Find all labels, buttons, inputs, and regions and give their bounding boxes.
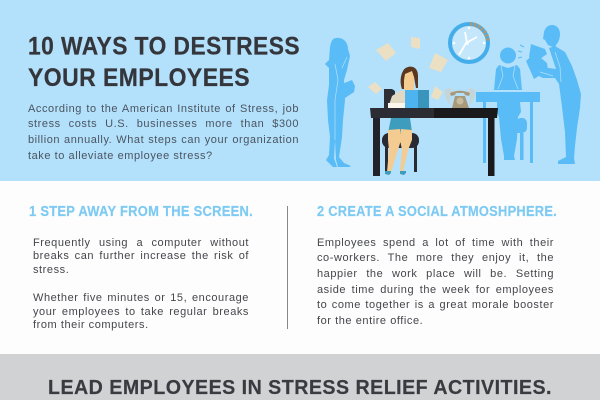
text: tip 2 body: to come together is a great morale booster [317,299,554,311]
title: 10 WAYS TO DESTRESS [28,32,300,60]
illustration: stressed office scene [325,22,581,176]
text: tip 1 second paragraph: Whether five minutes or 15, encourage [33,292,249,304]
desk [370,108,498,176]
text: tip 2 body: Employees spend a lot of time with their [317,236,554,248]
text: tip 1 second paragraph [33,292,249,331]
hero band background [0,0,600,181]
text: tip 2 body [317,236,554,327]
text: tip 1 second paragraph: your employees to take regular breaks [33,306,249,318]
intro text: According to the American Institute of Stress, job [28,102,299,114]
title: YOUR EMPLOYEES [28,64,250,92]
intro text: take to alleviate employee stress? [28,150,213,162]
figure: woman at desk on chair [382,67,429,175]
text: tip 1 first paragraph: breaks can further increase the risk of [33,250,249,262]
icon: wall clock [450,24,488,62]
intro text: billion annually. What steps can your organization [28,134,299,146]
footer band background [0,354,600,400]
footer heading: LEAD EMPLOYEES IN STRESS RELIEF ACTIVITIES. [48,376,552,399]
figure: seated coworker and table [476,48,540,163]
icon: ringing telephone [445,88,475,108]
column divider [286,206,288,329]
text: tip 2 body: co-workers. The more they enjoy it, the [317,252,554,264]
text: tip 1 second paragraph: from their computers. [33,319,149,331]
icon: flying papers [368,37,448,100]
heading: tip 2: 2 CREATE A SOCIAL ATMOSHPHERE. [317,204,557,220]
heading: tip 1: 1 STEP AWAY FROM THE SCREEN. [29,204,253,220]
intro text: stress costs U.S. businesses more than $300 [28,118,299,130]
figure: boss with megaphone [518,25,581,164]
text: tip 1 first paragraph [33,236,249,276]
title [28,32,300,92]
figure: standing woman with folder [325,38,355,167]
text: tip 1 first paragraph: Frequently using a computer without [33,236,249,248]
text: tip 1 first paragraph: stress. [33,264,69,276]
text: tip 2 body: for the entire office. [317,315,423,327]
intro text [28,102,299,162]
text: tip 2 body: aside time during the week for employees [317,284,554,296]
text: tip 2 body: happier the work place will be. Setting [317,268,554,280]
